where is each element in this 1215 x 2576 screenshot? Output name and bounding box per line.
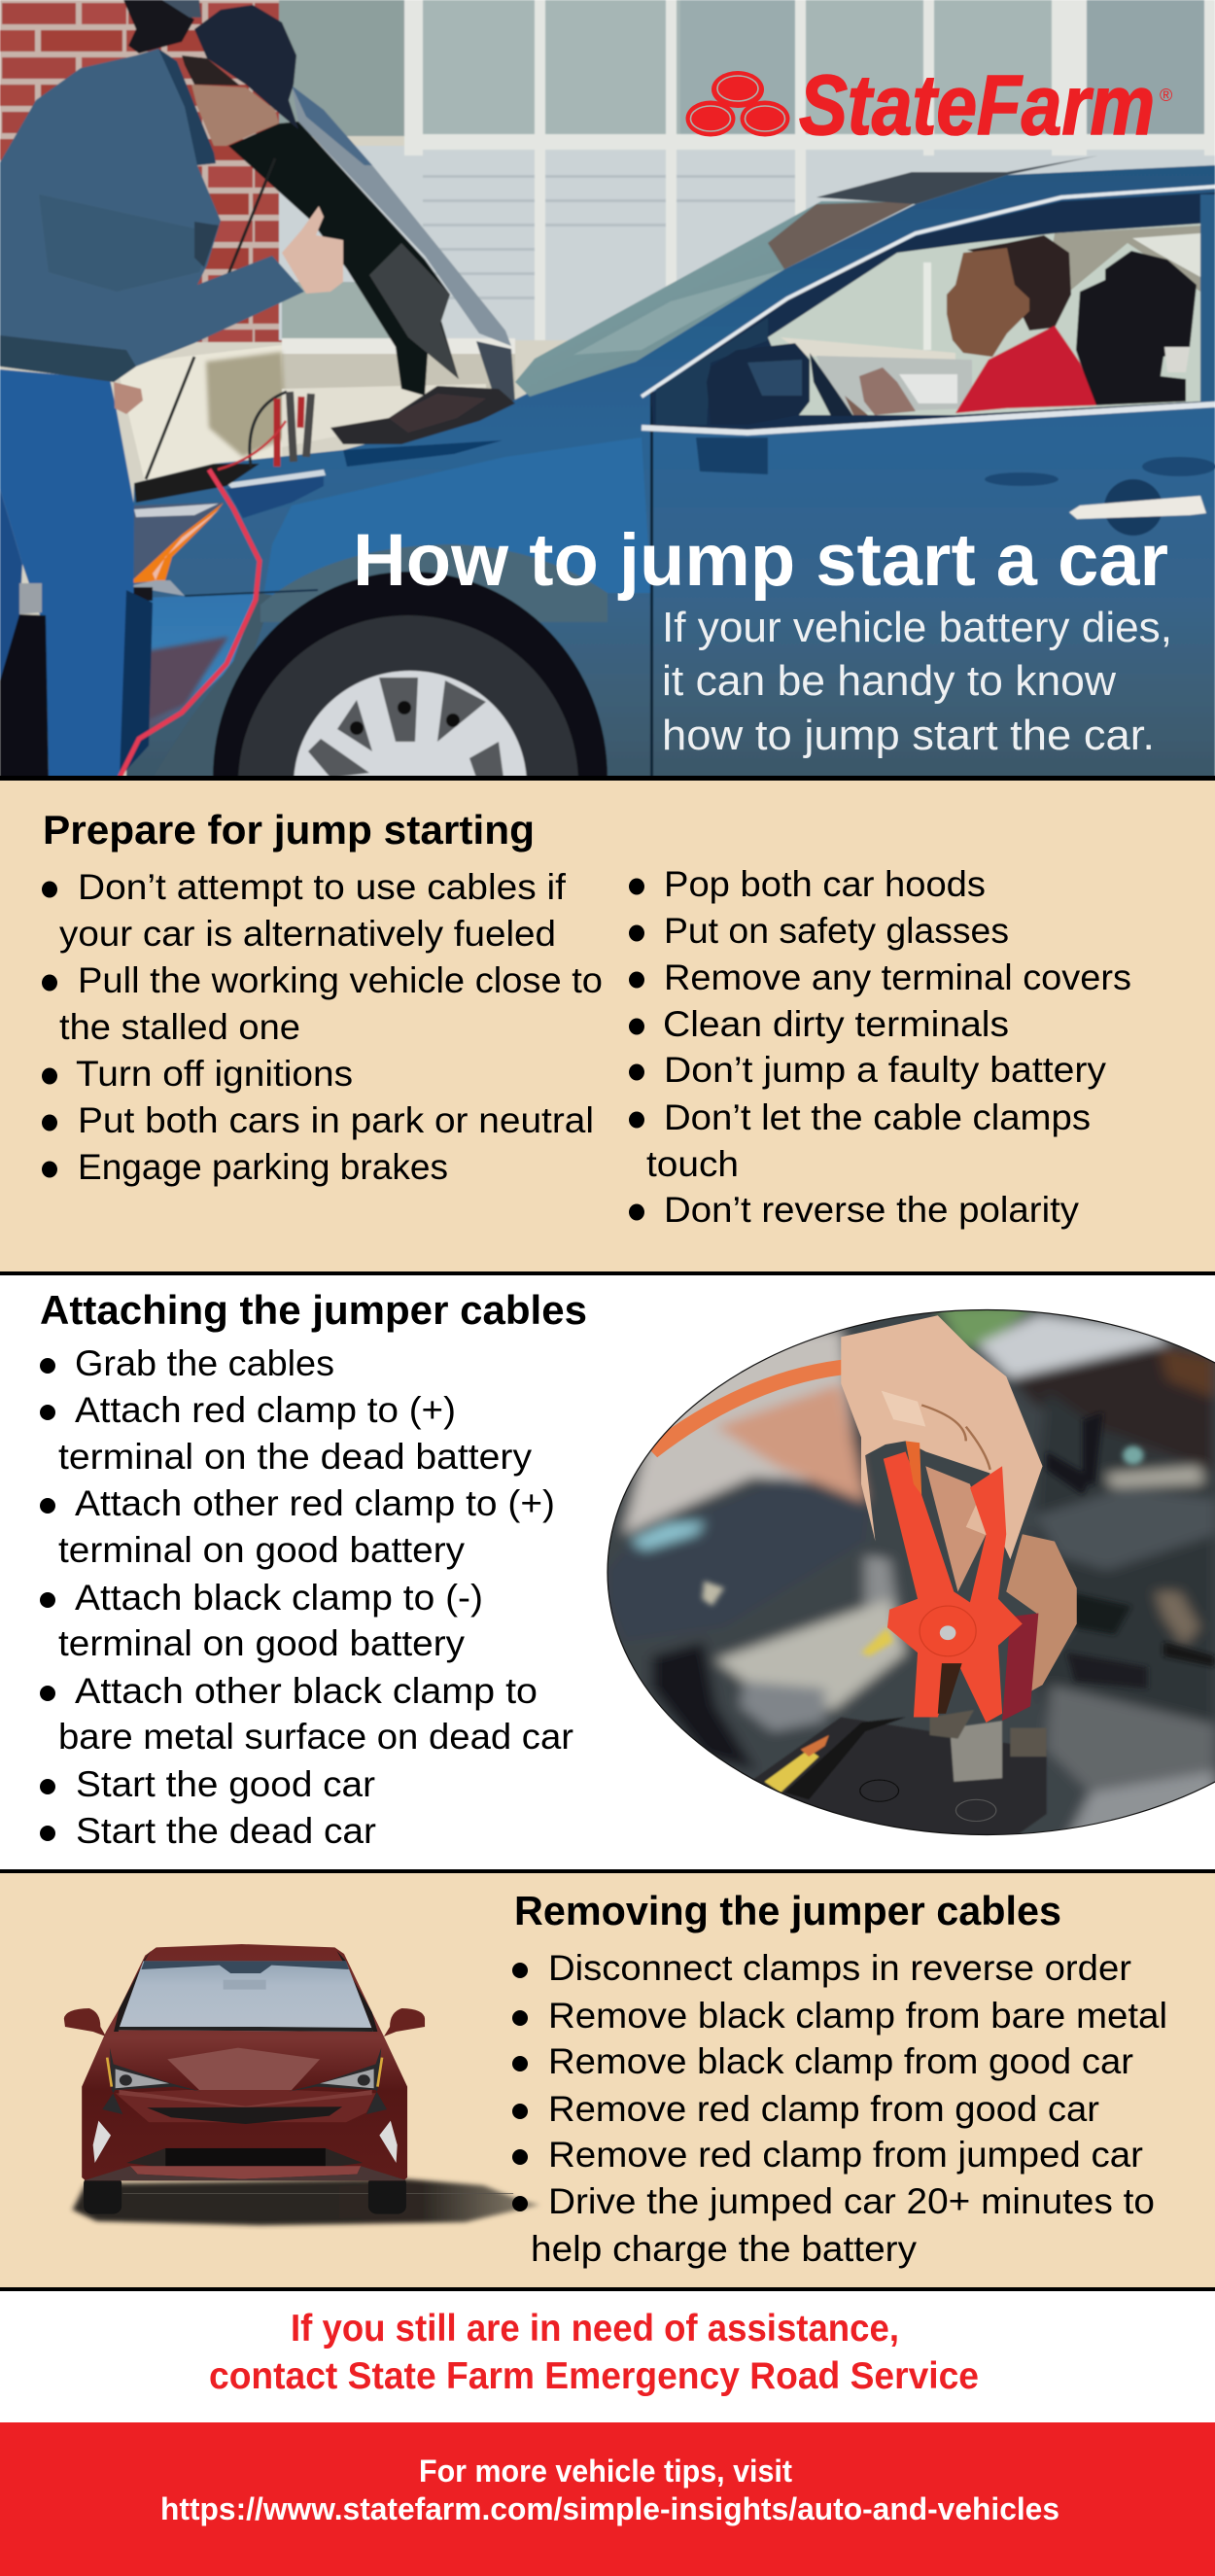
upper grille	[147, 2106, 342, 2124]
list: attaching steps: Attach black clamp to (-)	[75, 1578, 483, 1618]
lower grille	[126, 2148, 363, 2168]
list: removing steps: Remove black clamp from good car	[548, 2041, 1133, 2081]
blue car body	[126, 156, 1215, 778]
heading: removing: Removing the jumper cables	[514, 1888, 1061, 1933]
list: prepare left column: Put both cars in park or neutral	[78, 1100, 594, 1140]
list: prepare right column: Clean dirty terminals	[663, 1004, 1009, 1044]
cap	[194, 5, 298, 129]
heading: hero title: How to jump start a car	[353, 519, 1168, 602]
list: attaching steps: Grab the cables	[75, 1343, 334, 1383]
lower fender reflection	[146, 593, 258, 734]
list: attaching steps: Start the dead car	[76, 1811, 376, 1851]
thumbs up hand	[282, 206, 343, 294]
headlights	[102, 2048, 201, 2114]
car front view	[64, 1944, 539, 2225]
fender highlight	[262, 437, 651, 603]
list: prepare right column: Don’t jump a faulty battery	[664, 1050, 1107, 1090]
hands, cable and clamp	[651, 1315, 1077, 1822]
windshield	[515, 201, 919, 397]
building background	[0, 0, 1215, 778]
list: prepare left column: Turn off ignitions	[76, 1054, 353, 1094]
door shadow reflections	[696, 437, 1215, 486]
car shadow	[73, 2179, 539, 2225]
man in blue jacket	[0, 5, 343, 778]
photo: hands clamping red cable on battery	[608, 1310, 1215, 1834]
battery	[754, 1710, 1048, 1834]
headlight	[128, 503, 318, 601]
callout: emergency road service: If you still are in need of assistance,	[291, 2308, 899, 2350]
list: attaching steps: Attach other red clamp to (+)	[75, 1483, 555, 1523]
list: prepare right column: Remove any terminal covers	[664, 957, 1131, 997]
red cable	[120, 470, 260, 778]
list: attaching steps: terminal on good battery	[58, 1623, 466, 1663]
list: prepare right column: Put on safety glasses	[664, 911, 1009, 951]
text block: hero subtitle	[662, 604, 1172, 759]
heading: attaching: Attaching the jumper cables	[40, 1287, 587, 1333]
mirrors	[64, 2008, 106, 2036]
heading: prepare: Prepare for jump starting	[43, 807, 535, 853]
panel: hero photo	[0, 0, 1215, 776]
logo: State Farm	[686, 58, 1172, 153]
wheel and arch	[213, 544, 608, 984]
list: prepare right column: touch	[646, 1144, 739, 1184]
woman driver	[967, 235, 1071, 331]
list: prepare right column: Don’t let the cable clamps	[664, 1097, 1091, 1137]
list: prepare left column: Engage parking brakes	[78, 1147, 448, 1187]
panel: attaching the jumper cables	[40, 1295, 1215, 1843]
footer banner	[0, 2422, 1215, 2576]
lower hand	[114, 382, 143, 414]
photo: man jump starting a blue car	[0, 0, 1215, 776]
side mirror	[656, 318, 768, 425]
list: removing steps	[512, 1948, 1167, 2269]
jeans	[0, 369, 134, 778]
fog lights	[93, 2121, 111, 2163]
list: attaching steps: Attach other black clamp to	[75, 1671, 538, 1711]
list: removing steps: Remove black clamp from bare metal	[548, 1996, 1167, 2036]
list: prepare right column	[629, 864, 1131, 1230]
list: attaching steps: terminal on the dead battery	[58, 1437, 533, 1477]
list: removing steps: Remove red clamp from good car	[548, 2089, 1099, 2129]
callout: emergency road service	[209, 2308, 979, 2397]
list: attaching steps: terminal on good battery	[58, 1530, 466, 1570]
hood highlight	[167, 2048, 320, 2092]
blurred engine bay background	[608, 1310, 1215, 1833]
windshield	[119, 1961, 373, 2032]
list: removing steps: Disconnect clamps in reverse order	[548, 1948, 1131, 1988]
icon: three interlocking ovals	[686, 71, 789, 136]
list: prepare left column: Pull the working vehicle close to	[78, 960, 603, 1000]
list: removing steps: help charge the battery	[531, 2229, 918, 2269]
list: attaching steps: Attach red clamp to (+)	[75, 1390, 456, 1430]
list: attaching steps: Start the good car	[76, 1764, 375, 1804]
engine bay with clamps	[134, 158, 515, 503]
wordmark: StateFarm	[799, 58, 1155, 153]
list: prepare left column	[42, 867, 603, 1187]
door handle	[1069, 479, 1206, 536]
footer link: https://www.statefarm.com/simple-insights/auto-and-vehicles	[160, 2491, 1059, 2526]
interior seats	[1076, 251, 1197, 405]
panel: removing the jumper cables	[0, 1869, 1215, 2291]
registered mark: ®	[1160, 86, 1172, 105]
list: prepare left column: your car is alternatively fueled	[59, 914, 556, 954]
footer text: For more vehicle tips, visit	[419, 2454, 792, 2489]
wheels	[84, 2176, 122, 2214]
text block: hero subtitle: how to jump start the car.	[662, 712, 1155, 759]
jacket	[0, 49, 304, 382]
engine highlights	[702, 1412, 1215, 1688]
list: removing steps: Remove red clamp from jumped car	[548, 2135, 1143, 2175]
list: prepare right column: Pop both car hoods	[664, 864, 986, 904]
list: attaching steps: bare metal surface on dead car	[58, 1717, 573, 1757]
panel: prepare for jump starting	[0, 776, 1215, 1275]
text block: hero subtitle: If your vehicle battery dies,	[662, 604, 1172, 651]
list: prepare left column: the stalled one	[59, 1007, 300, 1047]
side window	[642, 187, 1215, 433]
body	[82, 1944, 407, 2180]
list: prepare left column: Don’t attempt to use cables if	[78, 867, 567, 907]
list: removing steps: Drive the jumped car 20+ minutes to	[548, 2181, 1155, 2221]
list: attaching steps	[40, 1343, 573, 1851]
text block: hero subtitle: it can be handy to know	[662, 657, 1116, 705]
open hood	[123, 0, 515, 404]
face and hair	[191, 85, 279, 146]
callout: emergency road service: contact State Farm Emergency Road Service	[209, 2355, 979, 2397]
list: prepare right column: Don’t reverse the polarity	[664, 1190, 1080, 1230]
